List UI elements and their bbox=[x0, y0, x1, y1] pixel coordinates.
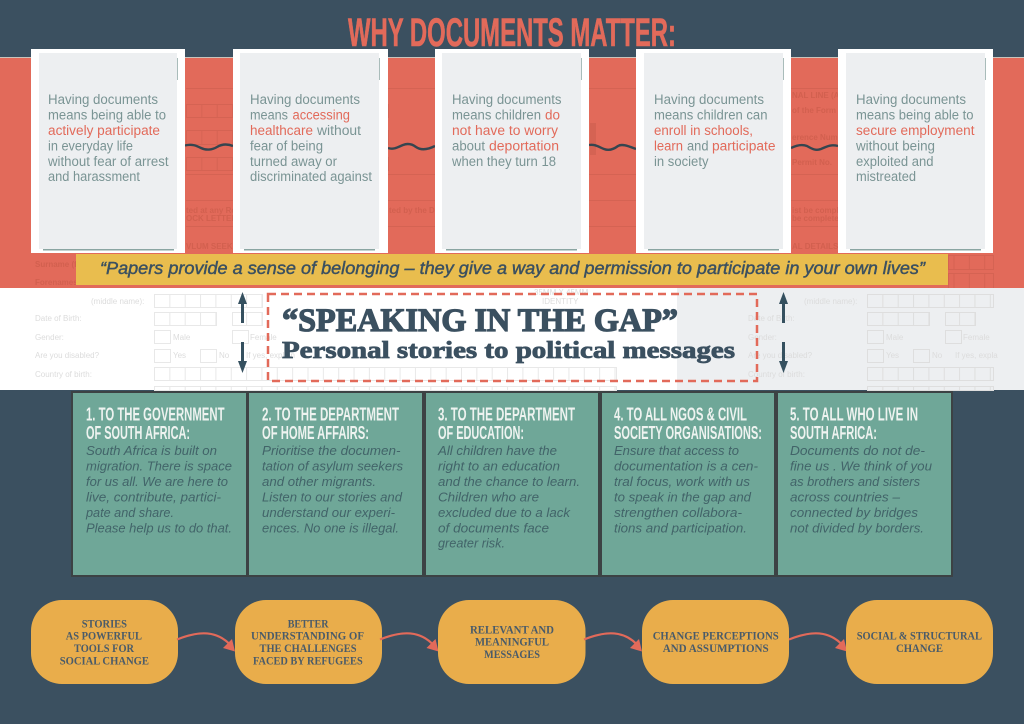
red band with faded form: of the Form bbox=[792, 106, 836, 115]
white form band: Country of birth: bbox=[748, 370, 805, 379]
white form band: Gender: bbox=[35, 333, 64, 342]
arrow: pill 2 to 3 bbox=[380, 633, 438, 652]
white form band: Male bbox=[173, 333, 191, 342]
card 3: no worry about deportation: when they turn 18 bbox=[451, 154, 556, 169]
white form band: Female bbox=[963, 333, 990, 342]
panel 1: government: Please help us to do that. bbox=[86, 520, 232, 535]
pill 3: relevant messages: MEANINGFUL bbox=[475, 635, 549, 649]
card 5: secure employment: means being able to bbox=[856, 107, 974, 122]
speaking in the gap callout bbox=[268, 294, 757, 381]
card 1: active participation: without fear of arrest bbox=[47, 154, 169, 169]
speaking in the gap callout: Personal stories to political messages bbox=[282, 338, 735, 364]
red band with faded form bbox=[0, 57, 1024, 288]
panel 3: education: All children have the bbox=[437, 443, 557, 458]
arrow: pill 4 to 5 bbox=[789, 633, 847, 652]
pill 1: stories: STORIES bbox=[82, 616, 127, 630]
panel 1: government bbox=[73, 393, 246, 575]
quote banner: “Papers provide a sense of belonging – they give a way and permission to participate in your own lives” bbox=[100, 258, 926, 278]
arrows: left up and down bbox=[238, 292, 247, 373]
card 4: enroll in schools bbox=[636, 49, 791, 253]
card 4: enroll in schools: participate bbox=[712, 138, 776, 153]
red band with faded form: AL DETAILS bbox=[792, 242, 839, 251]
card 5: secure employment: secure employment bbox=[856, 123, 975, 138]
panel 4: ngos and civil society: Ensure that access to bbox=[614, 443, 739, 458]
card 2: accessing healthcare: Having documents bbox=[250, 92, 360, 107]
red band with faded form: Surname (fa bbox=[35, 260, 82, 269]
pill 1: stories: AS POWERFUL bbox=[66, 629, 142, 643]
pill 5: social and structural change: CHANGE bbox=[896, 641, 943, 655]
panel 4: ngos and civil society: to speak in the gap and bbox=[614, 489, 752, 504]
white form band: 35MM X 45MM bbox=[534, 288, 589, 297]
white form band: Female bbox=[250, 333, 277, 342]
panel 4: ngos and civil society: documentation is a cen- bbox=[614, 458, 759, 473]
panel 3: education: OF EDUCATION: bbox=[438, 422, 524, 443]
panel 2: home affairs: understand our experi- bbox=[262, 505, 396, 520]
panel 3: education: of documents face bbox=[438, 520, 549, 535]
white form band: Are you disabled? bbox=[35, 351, 100, 360]
pill 1: stories: TOOLS FOR bbox=[74, 641, 134, 655]
arrows: right up and down bbox=[779, 292, 788, 373]
white form band: If yes, explain bbox=[246, 351, 295, 360]
quote banner bbox=[76, 254, 948, 285]
red band with faded form: NAL LINE (AT bbox=[792, 91, 844, 100]
panel 2: home affairs: and other migrants. bbox=[262, 474, 376, 489]
panel 5: all who live in south africa: SOUTH AFRICA: bbox=[790, 422, 877, 443]
panel 2: home affairs: 2. TO THE DEPARTMENT bbox=[262, 403, 399, 424]
card 2: accessing healthcare: means bbox=[250, 107, 288, 122]
panel 2: home affairs: ences. No one is illegal. bbox=[262, 520, 399, 535]
card 3: no worry about deportation: do bbox=[545, 107, 560, 122]
card 1: active participation: actively participate bbox=[48, 123, 160, 138]
panel 1: government: pate and share. bbox=[85, 505, 174, 520]
arrow: pill 1 to 2 bbox=[177, 633, 235, 652]
card 1: active participation: and harassment bbox=[48, 169, 140, 184]
panel 5: all who live in south africa: connected by bridges bbox=[790, 505, 919, 520]
white form band: If yes, expla bbox=[955, 351, 998, 360]
card 4: enroll in schools: enroll in schools, bbox=[654, 123, 753, 138]
white form band: Yes bbox=[173, 351, 186, 360]
panel 5: all who live in south africa: fine us . We think of you bbox=[790, 458, 932, 473]
card 5: secure employment: mistreated bbox=[856, 169, 916, 184]
card 3: no worry about deportation: deportation bbox=[489, 138, 559, 153]
panel 4: ngos and civil society: SOCIETY ORGANISATIONS: bbox=[614, 422, 762, 443]
pill 4: change perceptions: CHANGE PERCEPTIONS bbox=[653, 629, 779, 643]
panel 2: home affairs: OF HOME AFFAIRS: bbox=[262, 422, 369, 443]
card 4: enroll in schools: Having documents bbox=[654, 92, 764, 107]
squiggle connectors between cards bbox=[185, 144, 838, 150]
red band with faded form: be completed bbox=[792, 214, 844, 223]
pill 2: better understanding: UNDERSTANDING OF bbox=[251, 629, 364, 643]
panel 3: education bbox=[426, 393, 598, 575]
panel 4: ngos and civil society: strengthen collabora- bbox=[614, 505, 743, 520]
panel 1: government: live, contribute, partici- bbox=[86, 489, 222, 504]
card 2: accessing healthcare: healthcare bbox=[250, 123, 313, 138]
pill 3: relevant messages: RELEVANT AND bbox=[470, 622, 554, 636]
panel 3: education: 3. TO THE DEPARTMENT bbox=[438, 403, 575, 424]
card 5: secure employment: without being bbox=[855, 138, 935, 153]
card 1: active participation bbox=[31, 49, 185, 253]
white form band: No bbox=[932, 351, 943, 360]
red band with faded form: erence Numbe bbox=[792, 133, 848, 142]
panel 5: all who live in south africa: not divided by borders. bbox=[790, 520, 924, 535]
card 4: enroll in schools: learn bbox=[654, 138, 683, 153]
white form band: Yes bbox=[886, 351, 899, 360]
speaking in the gap callout: “SPEAKING IN THE GAP” bbox=[282, 303, 678, 339]
pill 2: better understanding: BETTER bbox=[288, 616, 329, 630]
white form band: Are you disabled? bbox=[748, 351, 813, 360]
pill 5: social and structural change: SOCIAL & STRUCTURAL bbox=[857, 629, 982, 643]
red band with faded form: ist be complete bbox=[792, 206, 851, 215]
panel 4: ngos and civil society: tions and participation. bbox=[614, 520, 747, 535]
white form band: Date of Birth: bbox=[35, 314, 82, 323]
panel 1: government: OF SOUTH AFRICA: bbox=[86, 422, 190, 443]
card 2: accessing healthcare: discriminated against bbox=[250, 169, 372, 184]
pill 5: social and structural change bbox=[846, 600, 993, 684]
card 1: active participation: means being able to bbox=[48, 107, 166, 122]
panel 4: ngos and civil society: tral focus, work with us bbox=[614, 474, 751, 489]
white form band: (middle name): bbox=[91, 297, 144, 306]
title: WHY DOCUMENTS MATTER: bbox=[348, 11, 676, 55]
card 4: enroll in schools: means children can bbox=[654, 107, 768, 122]
card 2: accessing healthcare: turned away or bbox=[250, 154, 337, 169]
panel 1: government: 1. TO THE GOVERNMENT bbox=[86, 403, 224, 424]
red band with faded form: ted at any Ref bbox=[186, 206, 239, 215]
panel 2: home affairs: Listen to our stories and bbox=[262, 489, 403, 504]
panel 1: government: for us all. We are here to bbox=[86, 474, 228, 489]
panel 5: all who live in south africa: as brothers and sisters bbox=[790, 474, 920, 489]
panel 3: education: right to an education bbox=[438, 458, 560, 473]
red band with faded form: Forenames bbox=[35, 278, 78, 287]
card 1: active participation: in everyday life bbox=[48, 138, 133, 153]
white form band: Country of birth: bbox=[35, 370, 92, 379]
arrow: pill 3 to 4 bbox=[584, 633, 642, 652]
pill 4: change perceptions bbox=[642, 600, 789, 684]
pill 2: better understanding: FACED BY REFUGEES bbox=[253, 654, 363, 668]
panel 3: education: Children who are bbox=[438, 489, 539, 504]
white form band: No bbox=[219, 351, 230, 360]
card 3: no worry about deportation bbox=[435, 49, 589, 253]
panel 5: all who live in south africa: across countries – bbox=[790, 489, 901, 504]
white form band: Date of Birth: bbox=[748, 314, 795, 323]
card 3: no worry about deportation: means children bbox=[452, 107, 541, 122]
panel 5: all who live in south africa: 5. TO ALL WHO LIVE IN bbox=[790, 403, 918, 424]
card 4: enroll in schools: and bbox=[687, 138, 708, 153]
white form band: (middle name): bbox=[804, 297, 857, 306]
pill 3: relevant messages bbox=[438, 600, 586, 684]
card 3: no worry about deportation: not have to worry bbox=[452, 123, 558, 138]
white form band: Gender: bbox=[748, 333, 777, 342]
panel frame bbox=[71, 391, 953, 577]
panel 5: all who live in south africa bbox=[778, 393, 951, 575]
red band with faded form: ted by the Direc bbox=[389, 206, 450, 215]
red band with faded form: VLUM SEEKE bbox=[186, 242, 239, 251]
white form band bbox=[0, 288, 1024, 390]
pill 1: stories bbox=[31, 600, 178, 684]
panel 3: education: greater risk. bbox=[438, 536, 505, 551]
card 3: no worry about deportation: about bbox=[452, 138, 485, 153]
card 2: accessing healthcare: without bbox=[316, 123, 361, 138]
panel 4: ngos and civil society: 4. TO ALL NGOS & CIVIL bbox=[614, 403, 747, 424]
panel 4: ngos and civil society bbox=[602, 393, 774, 575]
card 2: accessing healthcare bbox=[233, 49, 388, 253]
panel 5: all who live in south africa: Documents do not de- bbox=[790, 443, 926, 458]
card 5: secure employment: exploited and bbox=[856, 154, 934, 169]
red band with faded form: Permit No. bbox=[792, 158, 832, 167]
white form band: IDENTITY bbox=[542, 297, 579, 306]
panel 1: government: South Africa is built on bbox=[86, 443, 217, 458]
panel 2: home affairs bbox=[249, 393, 422, 575]
pill 3: relevant messages: MESSAGES bbox=[484, 647, 540, 661]
panel 2: home affairs: tation of asylum seekers bbox=[262, 458, 403, 473]
card 5: secure employment bbox=[838, 49, 993, 253]
panel 2: home affairs: Prioritise the documen- bbox=[262, 443, 401, 458]
card 2: accessing healthcare: accessing bbox=[292, 107, 350, 122]
panel 3: education: and the chance to learn. bbox=[438, 474, 580, 489]
card 2: accessing healthcare: fear of being bbox=[250, 138, 323, 153]
card 1: active participation: Having documents bbox=[48, 92, 158, 107]
panel 1: government: migration. There is space bbox=[86, 458, 232, 473]
card 3: no worry about deportation: Having documents bbox=[452, 92, 562, 107]
red band with faded form: OCK LETTERS bbox=[186, 214, 243, 223]
card 5: secure employment: Having documents bbox=[856, 92, 966, 107]
pill 2: better understanding: THE CHALLENGES bbox=[260, 641, 357, 655]
white form band: Male bbox=[886, 333, 904, 342]
pill 1: stories: SOCIAL CHANGE bbox=[60, 654, 149, 668]
pill 4: change perceptions: AND ASSUMPTIONS bbox=[663, 641, 769, 655]
pill 2: better understanding bbox=[235, 600, 382, 684]
card 4: enroll in schools: in society bbox=[654, 154, 709, 169]
panel 3: education: excluded due to a lack bbox=[438, 505, 572, 520]
